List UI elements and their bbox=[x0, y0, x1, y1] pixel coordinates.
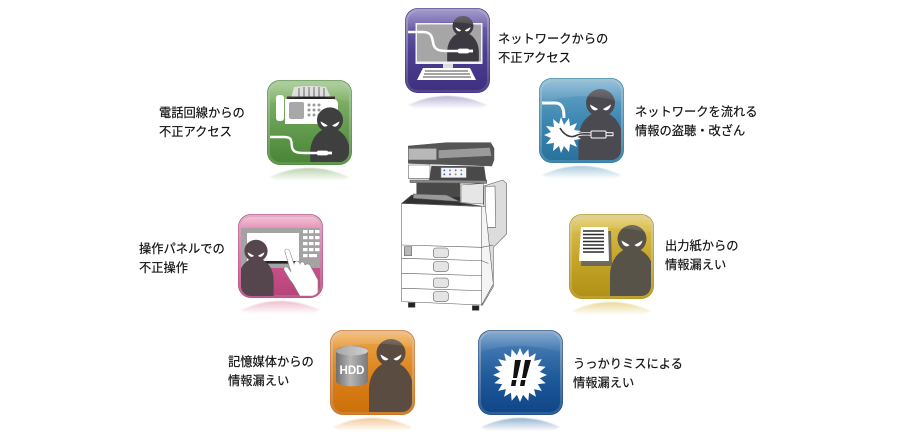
icon: phone line unauthorized access (green) bbox=[267, 80, 352, 181]
icon: storage media leak (orange): HDD bbox=[340, 365, 364, 377]
label: accidental mistake leak bbox=[573, 357, 683, 390]
label: phone line unauthorized access: 電話回線からの bbox=[159, 105, 245, 120]
label: network unauthorized access bbox=[498, 32, 608, 65]
label: network unauthorized access: 不正アクセス bbox=[498, 51, 571, 65]
icon: network eavesdropping and tampering (blue) bbox=[539, 78, 624, 179]
label: printed paper leak: 出力紙からの bbox=[665, 239, 738, 253]
label: accidental mistake leak: 情報漏えい bbox=[573, 375, 634, 390]
multifunction printer bbox=[402, 143, 507, 310]
icon: accidental mistake leak (navy) bbox=[478, 330, 563, 431]
label: control panel misuse: 不正操作 bbox=[139, 260, 188, 275]
label: network eavesdropping and tampering: 情報の盗聴・改ざん bbox=[635, 123, 745, 138]
label: network eavesdropping and tampering bbox=[635, 105, 758, 138]
label: control panel misuse bbox=[139, 241, 225, 275]
icon: printed paper leak (yellow) bbox=[569, 214, 654, 315]
label: storage media leak: 情報漏えい bbox=[228, 373, 289, 388]
label: accidental mistake leak: うっかりミスによる bbox=[573, 357, 683, 371]
label: printed paper leak bbox=[665, 239, 738, 272]
label: storage media leak bbox=[228, 354, 314, 388]
label: control panel misuse: 操作パネルでの bbox=[139, 241, 225, 256]
icon: control panel misuse (pink) bbox=[238, 214, 323, 314]
label: storage media leak: 記憶媒体からの bbox=[228, 354, 314, 369]
label: phone line unauthorized access: 不正アクセス bbox=[159, 125, 232, 139]
icon: storage media leak (orange) bbox=[330, 330, 415, 431]
side paper tray bbox=[483, 180, 507, 305]
icon: network unauthorized access (purple) bbox=[405, 8, 490, 109]
label: network unauthorized access: ネットワークからの bbox=[498, 32, 608, 46]
label: printed paper leak: 情報漏えい bbox=[665, 257, 726, 272]
label: network eavesdropping and tampering: ネットワークを流れる bbox=[635, 105, 758, 119]
label: phone line unauthorized access bbox=[159, 105, 245, 139]
